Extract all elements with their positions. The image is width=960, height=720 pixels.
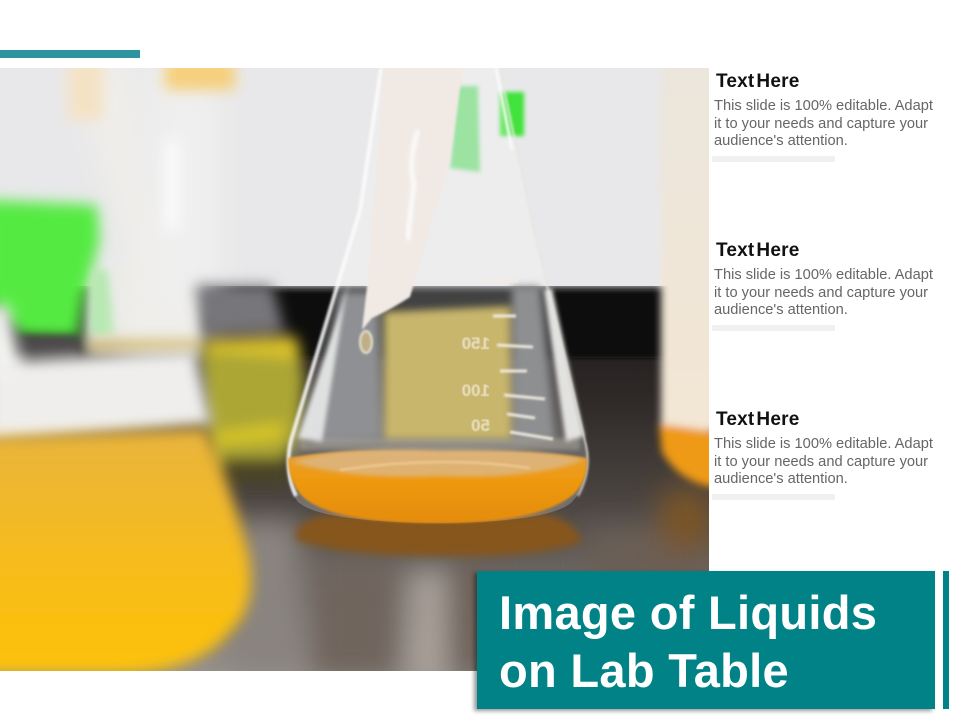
underline 3	[712, 494, 835, 500]
description 2: audience's attention.	[714, 302, 848, 318]
liquid surface highlight	[292, 449, 584, 477]
background wall	[0, 68, 709, 293]
title panel	[477, 571, 935, 709]
description 1: This slide is 100% editable. Adapt	[714, 98, 933, 114]
photo: liquids on lab table	[0, 68, 709, 671]
flask glass wedges	[298, 280, 584, 450]
graduation numbers: 150	[462, 334, 490, 353]
blurred white collar of near beaker	[0, 350, 212, 445]
flask glass edges	[288, 68, 588, 496]
title: on Lab Table	[499, 644, 789, 697]
heading 2: Text Here	[716, 240, 800, 261]
description 3	[714, 436, 933, 487]
graduation marks	[488, 281, 553, 439]
title: Image of Liquids	[499, 586, 877, 639]
right bottle	[659, 60, 721, 488]
underline 2	[712, 325, 835, 331]
dark band behind the table	[270, 290, 670, 358]
blurred yellow beaker	[0, 428, 251, 674]
blurred yellow flask	[88, 285, 304, 484]
table reflections	[230, 490, 710, 680]
description 2: This slide is 100% editable. Adapt	[714, 267, 933, 283]
description 2	[714, 267, 933, 318]
description 1: it to your needs and capture your	[714, 116, 928, 132]
description 3: This slide is 100% editable. Adapt	[714, 436, 933, 452]
description 3: audience's attention.	[714, 471, 848, 487]
text block 1	[712, 71, 933, 162]
text block 3	[712, 409, 933, 500]
heading 3: Text Here	[716, 409, 800, 430]
text block 2	[712, 240, 933, 331]
title	[499, 586, 877, 697]
graduation numbers: 100	[462, 381, 490, 400]
table	[0, 286, 709, 671]
graduation numbers: 50	[471, 416, 490, 435]
drop	[360, 331, 372, 353]
flask glass body	[287, 68, 588, 523]
blurred white flask base	[85, 265, 200, 350]
blurred green flask	[0, 200, 100, 338]
underline 1	[712, 156, 835, 162]
main erlenmeyer flask	[287, 68, 588, 523]
paper strip	[362, 68, 464, 330]
accent bar: title right	[943, 571, 949, 709]
description 2: it to your needs and capture your	[714, 284, 928, 300]
description 3: it to your needs and capture your	[714, 454, 928, 470]
description 1: audience's attention.	[714, 133, 848, 149]
blurred flask background	[70, 60, 220, 350]
graduation numbers	[462, 334, 490, 435]
description 1	[714, 98, 933, 149]
flask reflection	[296, 514, 582, 556]
accent bar: top left	[0, 50, 140, 58]
green label behind flask	[450, 86, 524, 172]
heading 1: Text Here	[716, 71, 800, 92]
orange liquid	[288, 451, 587, 523]
flask inner glass, grey shadows	[312, 286, 555, 442]
